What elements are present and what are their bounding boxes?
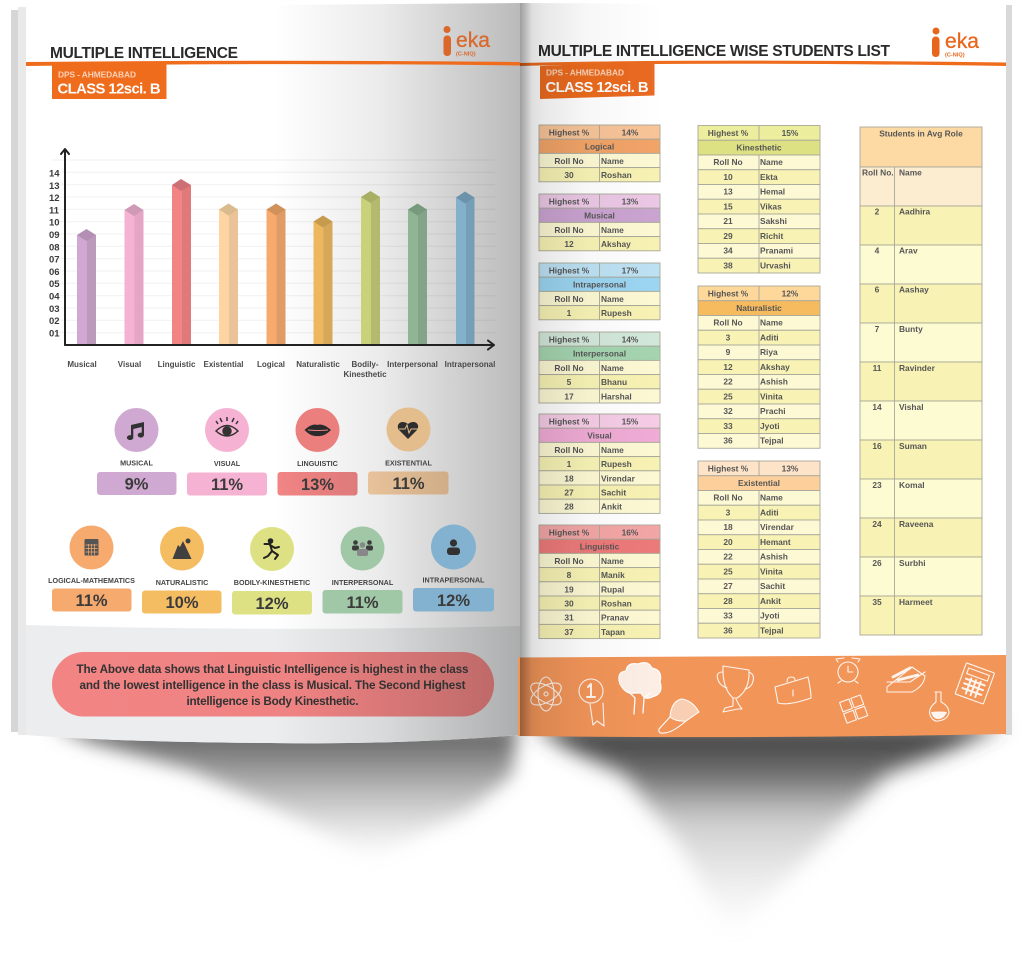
table: interpersonal: Name [601, 363, 624, 373]
table: students in avg role: Raveena [899, 519, 934, 529]
table: existential: 18 [723, 522, 733, 532]
table: kinesthetic: 38 [723, 260, 733, 270]
table: linguistic: Roshan [601, 598, 632, 608]
table: naturalistic: Ashish [760, 376, 788, 386]
page title: MULTIPLE INTELLIGENCE [50, 45, 238, 62]
table: interpersonal: Bhanu [601, 377, 627, 387]
table: students in avg role: 7 [875, 324, 880, 334]
card: visual 11% [187, 408, 267, 496]
bar: visual 11 [124, 204, 144, 344]
table: visual: 28 [564, 502, 574, 512]
table: naturalistic: Tejpal [760, 436, 784, 446]
table: intrapersonal: Intrapersonal [573, 280, 626, 290]
table: naturalistic: 33 [723, 421, 733, 431]
card: existential 11%: EXISTENTIAL [385, 458, 432, 468]
bar: intrapersonal 12 [456, 192, 474, 344]
grid lines and y-axis labels: 14 [49, 168, 60, 180]
table: interpersonal: Harshal [601, 391, 632, 401]
table: kinesthetic: Urvashi [760, 260, 791, 270]
logo: eka: (C-NIQ) [945, 52, 965, 58]
table: interpersonal: Roll No [554, 363, 584, 373]
table: existential: 13% [782, 464, 799, 474]
table: kinesthetic: Roll No [713, 157, 743, 167]
table: intrapersonal [539, 263, 660, 320]
bar: naturalistic 10 [314, 216, 332, 344]
table: naturalistic: Highest % [708, 288, 749, 298]
table: naturalistic: 3 [726, 332, 731, 342]
table: students in avg role: 6 [875, 284, 880, 294]
table: visual: Ankit [601, 502, 622, 512]
table: kinesthetic: Kinesthetic [736, 142, 782, 152]
icon: group of people [352, 540, 373, 556]
table: naturalistic: Aditi [760, 332, 779, 342]
table: naturalistic: 25 [723, 392, 733, 402]
table: naturalistic: 32 [723, 406, 733, 416]
orange header rule [520, 61, 1006, 66]
grid lines and y-axis labels: 10 [49, 218, 60, 228]
card: visual 11%: 11% [211, 476, 243, 494]
table: interpersonal: Highest % [549, 334, 590, 344]
bar: existential 11 [219, 204, 238, 344]
table: musical: Roll No [554, 225, 584, 235]
x-axis labels: Naturalistic [296, 360, 340, 369]
table: students in avg role: Roll No. [862, 168, 894, 178]
left page fold shading [26, 3, 520, 743]
table: linguistic: Name [601, 556, 624, 566]
table: linguistic: Rupal [601, 584, 624, 594]
table: existential: 20 [723, 537, 733, 547]
table: students in avg role: 24 [872, 519, 882, 529]
table: kinesthetic: Name [760, 157, 783, 167]
table: existential: Hemant [760, 537, 791, 547]
icon: mountain [172, 541, 192, 559]
icon: books [887, 667, 925, 692]
card: existential 11%: 11% [392, 475, 425, 493]
panel: right page [518, 3, 1006, 737]
table: naturalistic: Naturalistic [736, 303, 782, 313]
grid lines and y-axis labels: 06 [49, 267, 60, 278]
bar: logical 11 [266, 204, 286, 344]
table: existential: 22 [723, 552, 733, 562]
table: students in avg role: 23 [872, 480, 882, 490]
table: students in avg role: 26 [872, 558, 882, 568]
card: musical 9%: MUSICAL [120, 458, 153, 468]
card: logical-mathematics 11% [48, 526, 135, 612]
card: linguistic 13% [278, 408, 358, 496]
icon: runner [264, 539, 279, 559]
table: kinesthetic: Sakshi [760, 216, 787, 226]
table: visual: Roll No [554, 445, 584, 455]
table: students in avg role: Ravinder [899, 363, 936, 373]
grid lines and y-axis labels: 05 [49, 279, 60, 290]
table: intrapersonal: Highest % [549, 266, 590, 276]
grid lines and y-axis labels: 01 [49, 328, 60, 340]
table: naturalistic: 22 [723, 376, 733, 386]
class badge [52, 64, 166, 99]
table: naturalistic: Jyoti [760, 421, 780, 431]
table: logical: Highest % [549, 128, 590, 138]
table: linguistic: Highest % [549, 528, 590, 538]
logo: eka: (C-NIQ) [456, 52, 476, 58]
x-axis labels: Visual [118, 360, 141, 369]
card: visual 11%: VISUAL [214, 459, 241, 468]
table: linguistic: 31 [564, 613, 574, 623]
table: existential: Ashish [760, 552, 788, 562]
x-axis labels: Interpersonal [387, 360, 438, 369]
grid lines and y-axis labels: 08 [49, 242, 60, 254]
class badge [540, 61, 654, 99]
table: linguistic: Manik [601, 570, 625, 580]
table: intrapersonal: Rupesh [601, 308, 632, 318]
table: naturalistic: Vinita [760, 392, 783, 402]
card: bodily-kinesthetic 12% [232, 527, 312, 614]
grid lines and y-axis labels: 07 [49, 254, 60, 266]
table: logical: Roll No [554, 156, 584, 166]
table: naturalistic [698, 286, 820, 448]
table: kinesthetic: 34 [723, 246, 733, 256]
table: students in avg role: Suman [899, 441, 927, 451]
x-axis labels: Existential [203, 360, 244, 369]
table: existential: Aditi [760, 508, 779, 518]
x-axis labels: Bodily- [351, 360, 379, 369]
table: kinesthetic: 21 [723, 216, 733, 226]
table: kinesthetic: Richit [760, 231, 783, 241]
table: existential: 28 [723, 596, 733, 606]
page title: MULTIPLE INTELLIGENCE WISE STUDENTS LIST [538, 43, 891, 60]
table: linguistic: 16% [622, 528, 639, 538]
table: naturalistic: Roll No [713, 318, 743, 328]
table: musical: Name [601, 225, 624, 235]
left page stacked edges [11, 7, 27, 735]
callout: and the lowest intelligence in the class is Musical. The Second Highest [80, 679, 466, 692]
table: kinesthetic: Ekta [760, 172, 778, 182]
x-axis labels: Logical [257, 360, 285, 369]
card: interpersonal 11%: INTERPERSONAL [332, 578, 394, 587]
bar: musical 9 [77, 229, 96, 344]
right page fold shading [520, 3, 1006, 737]
table: existential: Jyoti [760, 610, 780, 620]
table: students in avg role: Arav [899, 246, 918, 256]
x-axis labels [67, 360, 495, 379]
table: kinesthetic: 15% [782, 128, 799, 138]
table: naturalistic: Akshay [760, 362, 790, 372]
table: students in avg role: Aashay [899, 284, 929, 294]
table: logical: Logical [585, 142, 614, 152]
table: existential: Vinita [760, 566, 783, 576]
table: visual: Visual [587, 431, 612, 441]
table: intrapersonal: 17% [622, 266, 639, 276]
table: visual: Virendar [601, 473, 636, 483]
card: linguistic 13%: 13% [301, 476, 334, 494]
table: musical: Akshay [601, 239, 631, 249]
table: existential: Roll No [713, 492, 743, 502]
table: linguistic: 19 [564, 584, 574, 594]
table: intrapersonal: 1 [567, 308, 572, 318]
axes with arrows [61, 149, 494, 350]
table: linguistic: Linguistic [580, 542, 620, 552]
table: visual: Sachit [601, 488, 626, 498]
table: kinesthetic: 29 [723, 231, 733, 241]
table: students in avg role [860, 127, 982, 635]
card: intrapersonal 12%: INTRAPERSONAL [423, 576, 485, 584]
table: linguistic: Pranav [601, 613, 629, 623]
table: musical: Musical [584, 211, 615, 221]
table: students in avg role: 35 [872, 597, 882, 607]
table: naturalistic: 36 [723, 436, 733, 446]
logo: eka [932, 28, 979, 58]
table: naturalistic: 9 [726, 347, 731, 357]
panel: left page footer band [26, 625, 520, 743]
table: existential: Name [760, 492, 783, 502]
table: intrapersonal: Roll No [554, 294, 584, 304]
right page stacked edge [1005, 5, 1012, 735]
table: existential: Tejpal [760, 626, 784, 636]
table: existential: Virendar [760, 522, 795, 532]
grid lines and y-axis labels: 02 [49, 316, 60, 327]
panel: orange footer band with doodles [518, 655, 1006, 737]
table: existential: Highest % [708, 464, 749, 474]
table: kinesthetic: 10 [723, 172, 733, 182]
icon: lips [304, 425, 331, 436]
icon: alarm clock [836, 658, 860, 683]
table: students in avg role: Harmeet [899, 597, 933, 607]
card: bodily-kinesthetic 12%: 12% [255, 595, 289, 613]
grid lines and y-axis labels: 03 [49, 304, 60, 315]
table: existential: 25 [723, 566, 733, 576]
table: musical: Highest % [549, 196, 590, 206]
table: existential [698, 461, 820, 638]
class badge: DPS - AHMEDABAD [546, 68, 624, 78]
table: kinesthetic: Hemal [760, 186, 785, 196]
icon: music note [127, 422, 144, 440]
bar: interpersonal 11 [408, 204, 427, 344]
table: visual: 18 [564, 473, 574, 483]
table: linguistic: 8 [567, 570, 572, 580]
table: linguistic [539, 525, 660, 639]
table: logical: Name [601, 156, 624, 166]
table: visual [539, 414, 660, 513]
card: interpersonal 11% [322, 526, 402, 614]
table: students in avg role: 16 [872, 441, 882, 451]
table: logical: 30 [564, 170, 574, 180]
table: existential: 27 [723, 581, 733, 591]
table: students in avg role: Students in Avg Role [879, 128, 963, 138]
card: naturalistic 10% [142, 526, 222, 614]
icon: cap [659, 699, 699, 733]
table: naturalistic: 12 [723, 362, 733, 372]
icon: atom [527, 677, 565, 711]
card: intrapersonal 12% [413, 524, 494, 612]
bar: bodily-kinesthetic 12 [361, 191, 380, 344]
card: logical-mathematics 11%: 11% [75, 592, 108, 610]
shadow under the booklet [50, 725, 1004, 935]
table: existential: 3 [726, 508, 731, 518]
table: students in avg role: 14 [872, 402, 882, 412]
bar chart [49, 149, 495, 379]
icon: eye [216, 417, 238, 436]
table: students in avg role: Aadhira [899, 206, 931, 216]
grid lines and y-axis labels: 13 [49, 181, 60, 192]
x-axis labels: Kinesthetic [343, 370, 387, 379]
grid lines and y-axis labels: 12 [49, 193, 60, 204]
table: kinesthetic: 13 [723, 186, 733, 196]
table: existential: Existential [738, 478, 780, 488]
table: interpersonal: 5 [567, 377, 572, 387]
table: visual: 27 [564, 488, 574, 498]
card: interpersonal 11%: 11% [346, 594, 379, 612]
card: intrapersonal 12%: 12% [437, 592, 470, 610]
card: linguistic 13%: LINGUISTIC [297, 459, 338, 468]
card: naturalistic 10%: 10% [165, 594, 199, 612]
table: musical: 13% [622, 196, 639, 206]
icon: calculator doodle [955, 663, 995, 704]
table: naturalistic: Riya [760, 347, 778, 357]
icon: briefcase [775, 677, 811, 704]
table: kinesthetic: Vikas [760, 202, 782, 212]
callout: intelligence is Body Kinesthetic. [186, 695, 358, 708]
icon: medal [579, 679, 604, 726]
grid lines and y-axis labels: 04 [49, 292, 60, 302]
table: visual: 1 [567, 459, 572, 469]
table: students in avg role: Name [899, 168, 922, 178]
table: naturalistic: 12% [782, 288, 799, 298]
table: visual: Name [601, 445, 624, 455]
table: interpersonal: 17 [564, 391, 574, 401]
card: musical 9% [97, 408, 176, 495]
class badge: CLASS 12sci. B [58, 82, 161, 98]
orange header rule [26, 61, 520, 66]
table: kinesthetic: Highest % [708, 128, 749, 138]
table: existential: Sachit [760, 581, 785, 591]
table: logical: 14% [622, 128, 639, 138]
table: interpersonal [539, 332, 660, 403]
table: musical [539, 194, 660, 251]
card: logical-mathematics 11%: LOGICAL-MATHEMATICS [48, 576, 135, 585]
icon: calculator [84, 539, 98, 556]
icon: tree [619, 663, 661, 714]
table: students in avg role: 4 [875, 246, 880, 256]
table: musical: 12 [564, 239, 574, 249]
table: students in avg role: Surbhi [899, 558, 926, 568]
table: students in avg role: Komal [899, 480, 925, 490]
grid lines and y-axis labels: 11 [49, 206, 60, 216]
card: existential 11% [368, 408, 448, 494]
table: interpersonal: 14% [622, 334, 639, 344]
logo: eka [444, 26, 490, 58]
table: existential: 36 [723, 626, 733, 636]
icon: trophy [717, 666, 753, 712]
callout [52, 652, 494, 716]
table: naturalistic: Prachi [760, 406, 786, 416]
icon: heart with pulse [398, 422, 418, 439]
table: naturalistic: Name [760, 318, 783, 328]
table: visual: Rupesh [601, 459, 632, 469]
grid lines and y-axis labels: 09 [49, 230, 60, 241]
table: logical [539, 125, 660, 182]
class badge: DPS - AHMEDABAD [58, 70, 136, 80]
x-axis labels: Intrapersonal [445, 360, 495, 369]
x-axis labels: Linguistic [158, 360, 196, 369]
table: kinesthetic [698, 126, 820, 273]
card: musical 9%: 9% [125, 476, 149, 494]
table: intrapersonal: Name [601, 294, 624, 304]
grid lines and y-axis labels [49, 160, 495, 340]
card: naturalistic 10%: NATURALISTIC [156, 578, 208, 587]
card: bodily-kinesthetic 12%: BODILY-KINESTHETIC [234, 578, 310, 587]
icon: person [447, 539, 460, 555]
table: kinesthetic: 15 [723, 202, 733, 212]
table: existential: Ankit [760, 596, 781, 606]
bar: linguistic 13 [172, 179, 191, 344]
table: linguistic: Roll No [554, 556, 584, 566]
table: logical: Roshan [601, 170, 632, 180]
table: linguistic: Tapan [601, 627, 625, 637]
table: visual: Highest % [549, 416, 590, 426]
x-axis labels: Musical [67, 360, 97, 369]
table: students in avg role: 11 [873, 363, 882, 373]
table: interpersonal: Interpersonal [573, 349, 626, 359]
table: students in avg role: Bunty [899, 324, 923, 334]
table: existential: 33 [723, 610, 733, 620]
class badge: CLASS 12sci. B [546, 80, 649, 96]
table: visual: 15% [622, 416, 639, 426]
table: students in avg role: 2 [875, 206, 880, 216]
logo: eka: eka [945, 30, 979, 53]
icon: flask [930, 692, 949, 721]
table: linguistic: 30 [564, 598, 574, 608]
logo: eka: eka [456, 29, 490, 52]
panel: left page [26, 3, 520, 743]
callout: The Above data shows that Linguistic Intelligence is highest in the class [76, 663, 469, 676]
icon: small calculator keys [840, 695, 868, 723]
table: linguistic: 37 [564, 627, 574, 637]
table: kinesthetic: Pranami [760, 246, 793, 256]
table: students in avg role: Vishal [899, 402, 924, 412]
